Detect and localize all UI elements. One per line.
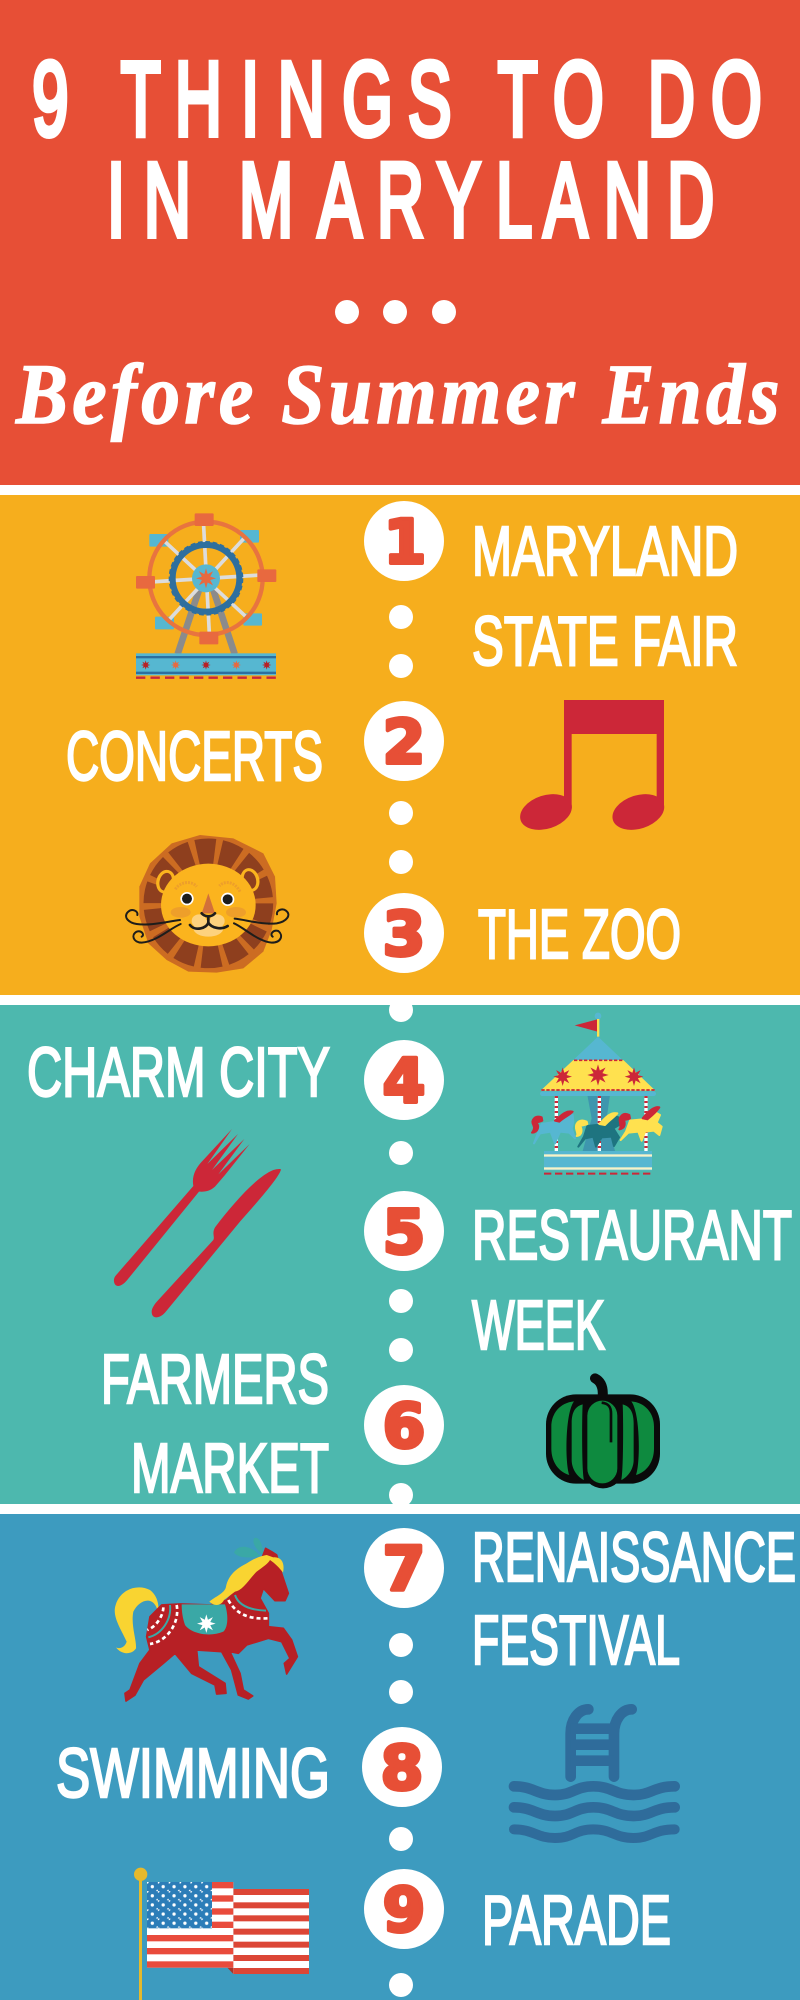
carousel horses — [532, 1107, 662, 1147]
number 3: 3 — [383, 899, 425, 970]
number 1 — [364, 501, 444, 581]
label: Concerts: CONCERTS — [66, 717, 323, 795]
number 6 — [364, 1385, 444, 1465]
label: Renaissance Festival — [472, 1518, 796, 1679]
number 3 — [364, 893, 444, 973]
title: 9 THINGS TO DO — [32, 40, 762, 158]
panel: teal section — [0, 1005, 800, 1504]
label: Restaurant Week — [472, 1196, 792, 1364]
icon: pumpkin — [546, 1378, 660, 1488]
subtitle: Before Summer Ends — [15, 346, 779, 442]
panel: blue section — [0, 1514, 800, 2000]
decorative three dots — [335, 300, 456, 324]
panel: header — [0, 0, 800, 485]
label: Swimming: SWIMMING — [56, 1734, 330, 1812]
icon: carousel — [532, 1013, 662, 1174]
label: Parade: PARADE — [482, 1881, 671, 1959]
number 8 — [362, 1727, 442, 1807]
number 9: 9 — [383, 1875, 425, 1946]
timeline dots — [389, 605, 413, 1997]
icon: lion — [126, 835, 288, 973]
number 4 — [364, 1040, 444, 1120]
number 5: 5 — [383, 1197, 425, 1268]
number 2: 2 — [383, 707, 425, 778]
number 6: 6 — [383, 1391, 425, 1462]
icon: fork and knife — [114, 1129, 281, 1317]
number 1: 1 — [384, 507, 426, 578]
number 8: 8 — [381, 1733, 423, 1804]
number 7 — [364, 1528, 444, 1608]
icon: swimming pool ladder and water — [514, 1709, 675, 1838]
title — [32, 40, 762, 259]
label: Charm City: CHARM CITY — [27, 1033, 330, 1111]
label: Farmers Market: MARKET — [131, 1429, 329, 1507]
label: Farmers Market: FARMERS — [101, 1340, 329, 1418]
number 5 — [364, 1191, 444, 1271]
title: IN MARYLAND — [107, 141, 714, 259]
panel: yellow section — [0, 495, 800, 995]
icon: horse — [115, 1538, 297, 1701]
number 9 — [364, 1869, 444, 1949]
number 4: 4 — [383, 1046, 425, 1117]
icon: american flag — [134, 1868, 309, 2000]
label: Farmers Market — [101, 1340, 329, 1507]
icon: ferris wheel — [136, 513, 276, 678]
label: Maryland State Fair — [472, 512, 738, 680]
number 7: 7 — [383, 1534, 425, 1605]
label: Restaurant Week: WEEK — [472, 1286, 605, 1364]
label: Renaissance Festival: FESTIVAL — [472, 1601, 680, 1679]
label: The Zoo: THE ZOO — [478, 895, 681, 973]
icon: music note — [515, 700, 669, 836]
number 2 — [364, 701, 444, 781]
